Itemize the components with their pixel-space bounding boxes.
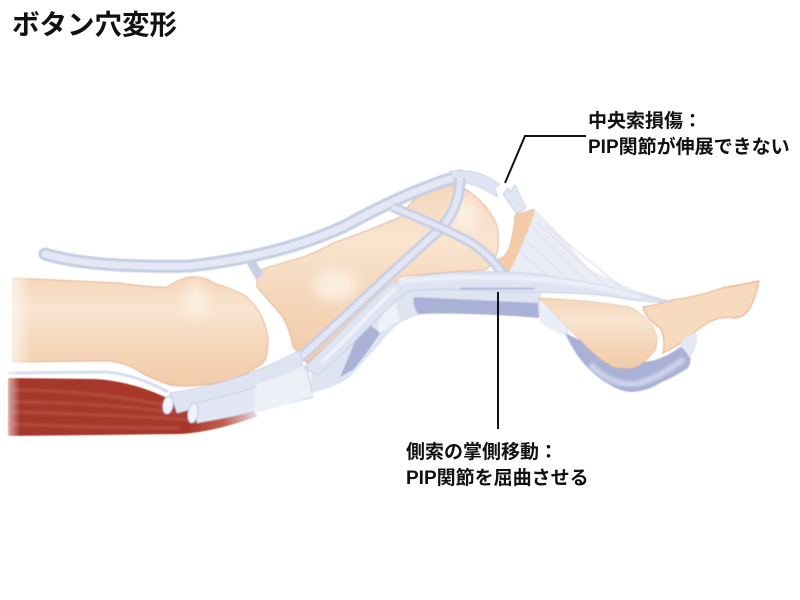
leader: central slip injury — [505, 136, 586, 183]
extensor tendon — [45, 171, 500, 277]
callout: lateral band volar shift — [406, 440, 589, 489]
leader: lateral band shift — [497, 292, 499, 429]
callout: lateral band volar shift: 側索の掌側移動： — [406, 440, 558, 463]
lateral bands crossing PIP — [300, 178, 503, 358]
bone: fingertip — [643, 281, 759, 353]
bone: distal side of PIP joint — [497, 209, 534, 274]
bone: middle-distal segment — [538, 298, 657, 368]
bone: proximal segment — [0, 270, 268, 386]
callout: central slip injury: 中央索損傷： — [588, 110, 702, 132]
flexor tendon sheath — [310, 284, 571, 393]
distal cuff — [680, 334, 697, 358]
anatomical finger illustration — [0, 171, 759, 440]
central slip stump — [503, 185, 526, 214]
title: ボタン穴変形 — [12, 9, 177, 40]
flexor tendon curve — [565, 333, 691, 392]
forearm-side muscle — [0, 370, 258, 440]
callout: central slip injury — [588, 110, 790, 158]
callout: central slip injury: PIP関節が伸展できない — [588, 135, 790, 158]
main lateral band — [303, 272, 672, 375]
callout: lateral band volar shift: PIP関節を屈曲させる — [406, 467, 589, 489]
extensor terminal triangle — [507, 210, 670, 301]
flexor tendon tubes — [162, 350, 313, 424]
bone: middle phalanx — [257, 185, 498, 363]
